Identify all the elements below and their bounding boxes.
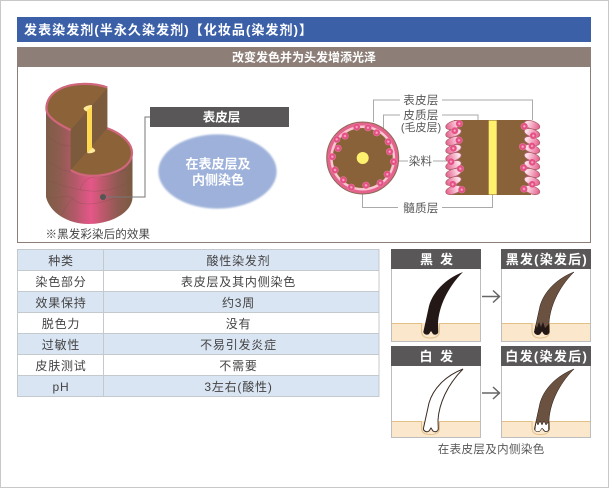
labels: hair layers: 皮质层 [403,109,439,122]
rim [46,84,132,176]
title bar: 发表染发剂(半永久染发剂)【化妆品(染发剂)】 [24,22,312,38]
callout: dyeing area: 在表皮层及 [185,156,251,172]
cortex [452,120,531,195]
row: type [48,253,271,268]
row: allergy [42,337,277,352]
row: decolor: 没有 [226,316,251,331]
row: pH: 3左右(酸性) [204,379,273,394]
row: skin test [35,358,258,373]
callout: dyeing area [158,134,276,208]
row: type: 种类 [48,254,74,268]
row: skin test: 不需要 [219,359,258,373]
panel: white hair after dyeing [501,346,591,438]
panel: black hair [391,249,481,342]
row: allergy: 不易引发炎症 [200,337,277,352]
panel: hair structure [17,47,591,242]
panel: black hair after dyeing: 黑发(染发后) [506,252,587,267]
panel: white hair after dyeing: 白发(染发后) [505,349,587,364]
arrow [482,290,500,302]
labels: hair layers: (毛皮层) [401,121,441,134]
cut face [71,88,107,170]
leader lines [362,100,532,208]
illustration: hair cutaway cylinder [46,84,132,224]
note: ※黑发彩染后的效果 [46,227,150,241]
labels: hair layers: 表皮层 [403,93,439,107]
label: cuticle: 表皮层 [203,110,240,124]
labels: hair layers: 髓质层 [403,202,439,215]
panel: black hair after dyeing [501,249,591,342]
row: duration: 效果保持 [35,295,87,310]
medulla band [489,120,497,194]
dye particles [447,120,537,193]
callout: dyeing area: 内侧染色 [192,172,244,188]
row: type: 酸性染发剂 [206,253,271,268]
title bar [17,17,591,42]
panel: white hair [391,346,481,438]
row: pH: pH [53,380,69,394]
panel: white hair: 白 发 [420,349,453,364]
row: duration: 约3周 [222,295,255,310]
left cuticle scales [445,119,462,196]
row: pH [53,379,273,394]
medulla [84,105,95,153]
leader: cuticle [100,117,150,200]
row: dyed part: 染色部分 [35,274,87,289]
row: skin test: 皮肤测试 [35,358,87,373]
row: duration [35,295,255,310]
row: allergy: 过敏性 [42,337,80,352]
top surface [46,84,132,176]
right cuticle scales [523,119,541,196]
arrow [482,387,500,399]
panel heading [17,47,591,67]
row: dyed part: 表皮层及其内侧染色 [181,274,296,289]
comparison table [18,250,379,396]
row: decolor: 脱色力 [42,316,80,331]
diagram: hair cross-section [327,122,399,194]
diagram: hair longitudinal section [445,119,541,196]
panel heading: 改变发色并为头发增添光泽 [232,50,376,64]
labels: hair layers: 染料 [409,154,432,168]
row: decolor [42,316,251,331]
row: dyed part [35,274,296,289]
label: cuticle [150,107,289,127]
panel: black hair: 黑 发 [420,252,453,267]
caption: 在表皮层及内侧染色 [438,442,545,456]
labels: hair layers [401,93,441,215]
